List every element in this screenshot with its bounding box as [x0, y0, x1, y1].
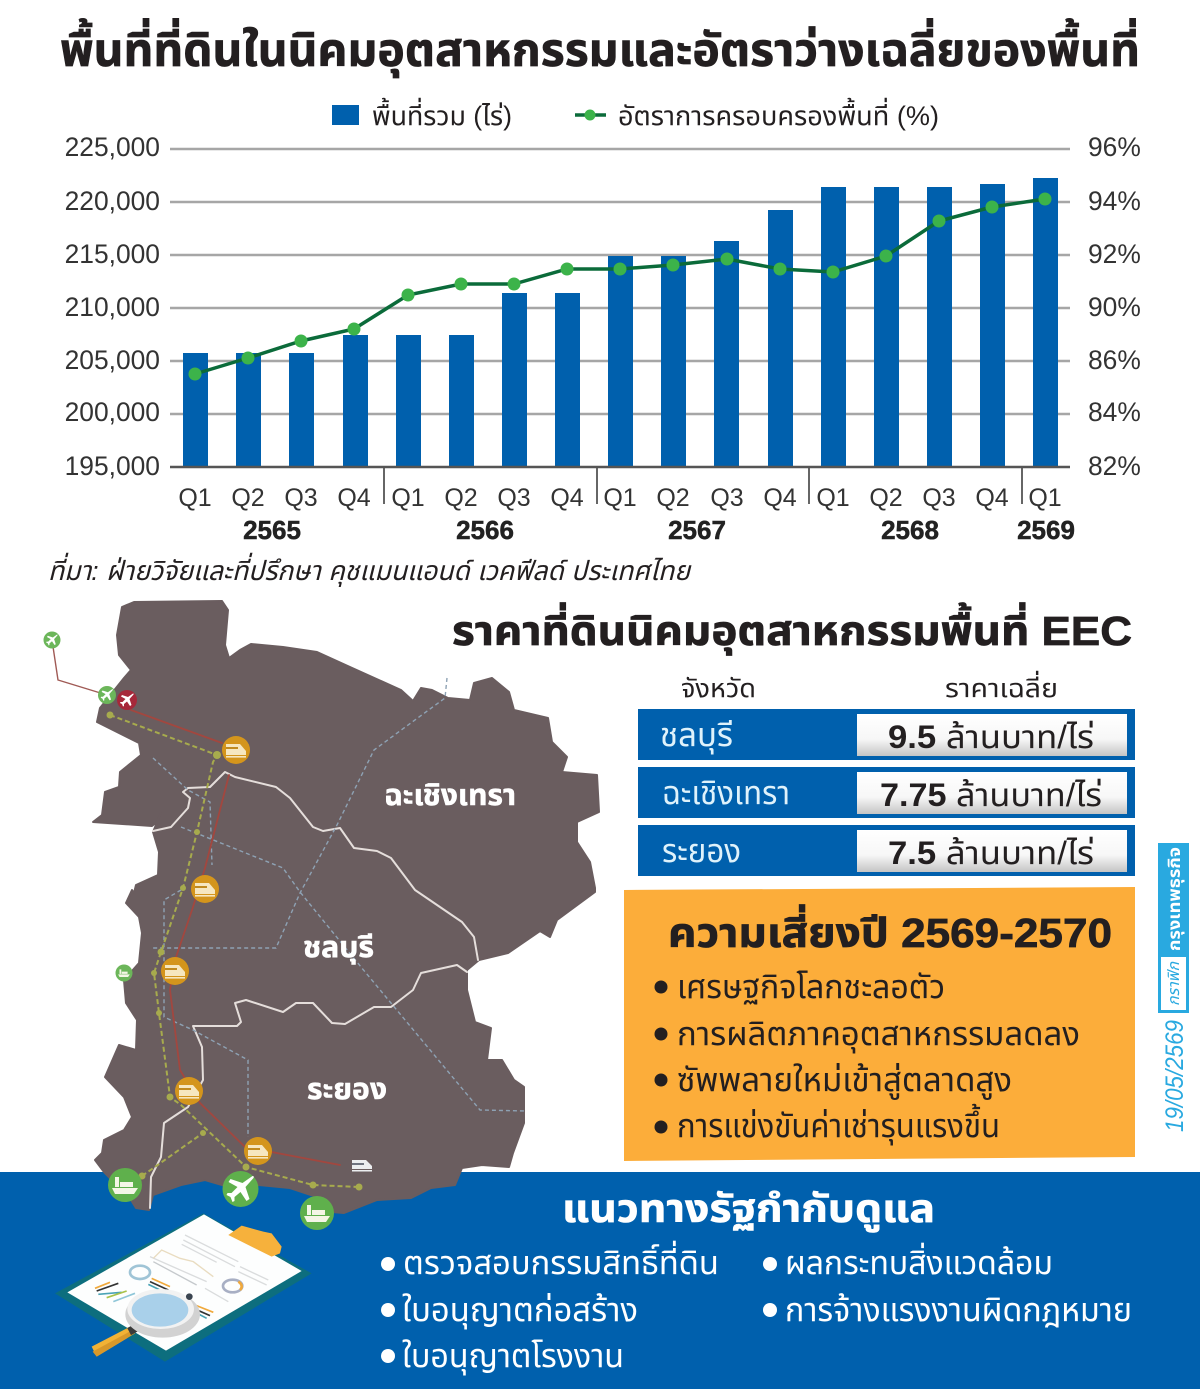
- oversight list: ใบอนุญาตโรงงาน: [402, 1337, 624, 1376]
- left axis labels: 200,000: [65, 397, 160, 427]
- quarter labels: Q4: [763, 484, 797, 512]
- left axis labels: 225,000: [65, 132, 160, 162]
- oversight list: การจ้างแรงงานผิดกฎหมาย: [785, 1291, 1132, 1328]
- side tag: publisher and date: กรุงเทพธุรกิจ: [1165, 847, 1185, 951]
- quarter labels: Q4: [550, 484, 584, 512]
- right axis labels: 96%: [1088, 132, 1141, 162]
- left axis labels: 210,000: [65, 292, 160, 322]
- left axis labels: [65, 132, 160, 481]
- quarter labels: Q2: [444, 484, 478, 512]
- risk list: การผลิตภาคอุตสาหกรรมลดลง: [677, 1015, 1080, 1054]
- quarter labels: Q4: [975, 484, 1009, 512]
- province label: Chonburi: ชลบุรี: [303, 932, 374, 964]
- heading: EEC land prices: ราคาที่ดินนิคมอุตสาหกรรมพื้นที่ EEC: [452, 602, 1132, 656]
- side tag: publisher and date: กราฟิก: [1166, 961, 1183, 1006]
- quarter labels: Q3: [922, 484, 956, 512]
- legend: total area: พื้นที่รวม (ไร่): [372, 97, 512, 131]
- side tag: publisher and date: 19/05/2569: [1161, 1020, 1189, 1132]
- chart legend: [332, 97, 939, 131]
- oversight list: ผลกระทบสิ่งแวดล้อม: [785, 1242, 1053, 1281]
- row: Chachoengsao: 7.75 ล้านบาท/ไร่: [880, 777, 1102, 813]
- oversight list: ตรวจสอบกรรมสิทธิ์ที่ดิน: [403, 1240, 719, 1281]
- legend: occupancy rate: อัตราการครอบครองพื้นที่ (%): [618, 97, 939, 131]
- quarter labels: Q3: [497, 484, 531, 512]
- year labels: [243, 515, 1075, 545]
- quarter labels: Q1: [816, 484, 850, 512]
- row: Chachoengsao: [638, 767, 1135, 818]
- table: price per province: [638, 670, 1135, 876]
- map of EEC provinces: [44, 601, 599, 1230]
- right axis labels: 82%: [1088, 451, 1141, 481]
- quarter labels: Q1: [391, 484, 425, 512]
- column headers: ราคาเฉลี่ย: [945, 670, 1058, 703]
- risk list: ซัพพลายใหม่เข้าสู่ตลาดสูง: [677, 1061, 1012, 1100]
- quarter labels: Q3: [710, 484, 744, 512]
- icon: clipboard and magnifier: [55, 1213, 312, 1362]
- quarter labels: [178, 484, 1062, 512]
- right axis labels: 86%: [1088, 345, 1141, 375]
- risk list: เศรษฐกิจโลกชะลอตัว: [677, 968, 945, 1005]
- year labels: 2568: [881, 515, 939, 545]
- legend: total area: [332, 97, 512, 131]
- quarter labels: Q1: [603, 484, 637, 512]
- row: Rayong: ระยอง: [662, 832, 741, 869]
- column headers: [681, 670, 1058, 703]
- risk list: [654, 968, 1080, 1146]
- oversight list: ใบอนุญาตก่อสร้าง: [402, 1291, 638, 1330]
- right axis labels: 84%: [1088, 397, 1141, 427]
- left axis labels: 205,000: [65, 345, 160, 375]
- year labels: 2569: [1017, 515, 1075, 545]
- combo chart: area bars and occupancy line: [65, 132, 1141, 545]
- row: Rayong: [638, 825, 1135, 876]
- province label: Chachoengsao: ฉะเชิงเทรา: [384, 780, 516, 812]
- oversight list: [381, 1240, 1132, 1376]
- bars: [183, 178, 1058, 467]
- column headers: จังหวัด: [681, 673, 756, 703]
- title: พื้นที่ที่ดินในนิคมอุตสาหกรรมและอัตราว่างเฉลี่ยของพื้นที่: [60, 18, 1140, 78]
- icons: seaports: [108, 964, 334, 1230]
- quarter labels: Q3: [284, 484, 318, 512]
- right axis labels: 94%: [1088, 186, 1141, 216]
- panel: risks 2569-2570: [624, 887, 1135, 1161]
- map landmass and route lines: [52, 601, 599, 1213]
- icons: train stations: [161, 736, 372, 1172]
- row: Chonburi: [638, 709, 1135, 760]
- quarter labels: Q2: [231, 484, 265, 512]
- left axis labels: 195,000: [65, 451, 160, 481]
- left axis labels: 220,000: [65, 186, 160, 216]
- right axis labels: 90%: [1088, 292, 1141, 322]
- quarter labels: Q2: [656, 484, 690, 512]
- right axis labels: [1088, 132, 1141, 481]
- panel: government oversight band: [0, 1172, 1200, 1389]
- year labels: 2565: [243, 515, 301, 545]
- axis baseline and year dividers: [170, 467, 1070, 504]
- right axis labels: 92%: [1088, 239, 1141, 269]
- source note: ที่มา: ฝ่ายวิจัยและที่ปรึกษา คุชแมนแอนด์ เวคฟีลด์ ประเทศไทย: [48, 552, 692, 588]
- occupancy line: [188, 192, 1052, 380]
- side tag: publisher and date: [1158, 843, 1189, 1132]
- risks heading: ความเสี่ยงปี 2569-2570: [668, 904, 1112, 956]
- quarter labels: Q1: [178, 484, 212, 512]
- quarter labels: Q2: [869, 484, 903, 512]
- icons: airports: [44, 632, 258, 1207]
- row: Chachoengsao: ฉะเชิงเทรา: [662, 774, 790, 811]
- year labels: 2566: [456, 515, 514, 545]
- province label: Rayong: ระยอง: [307, 1074, 387, 1106]
- year labels: 2567: [668, 515, 726, 545]
- row: Rayong: 7.5 ล้านบาท/ไร่: [888, 835, 1094, 871]
- heading: oversight guidelines: แนวทางรัฐกำกับดูแล: [562, 1188, 935, 1232]
- quarter labels: Q4: [337, 484, 371, 512]
- row: Chonburi: 9.5 ล้านบาท/ไร่: [888, 719, 1094, 755]
- left axis labels: 215,000: [65, 239, 160, 269]
- quarter labels: Q1: [1028, 484, 1062, 512]
- row: Chonburi: ชลบุรี: [660, 716, 733, 755]
- risk list: การแข่งขันค่าเช่ารุนแรงขึ้น: [677, 1103, 1000, 1146]
